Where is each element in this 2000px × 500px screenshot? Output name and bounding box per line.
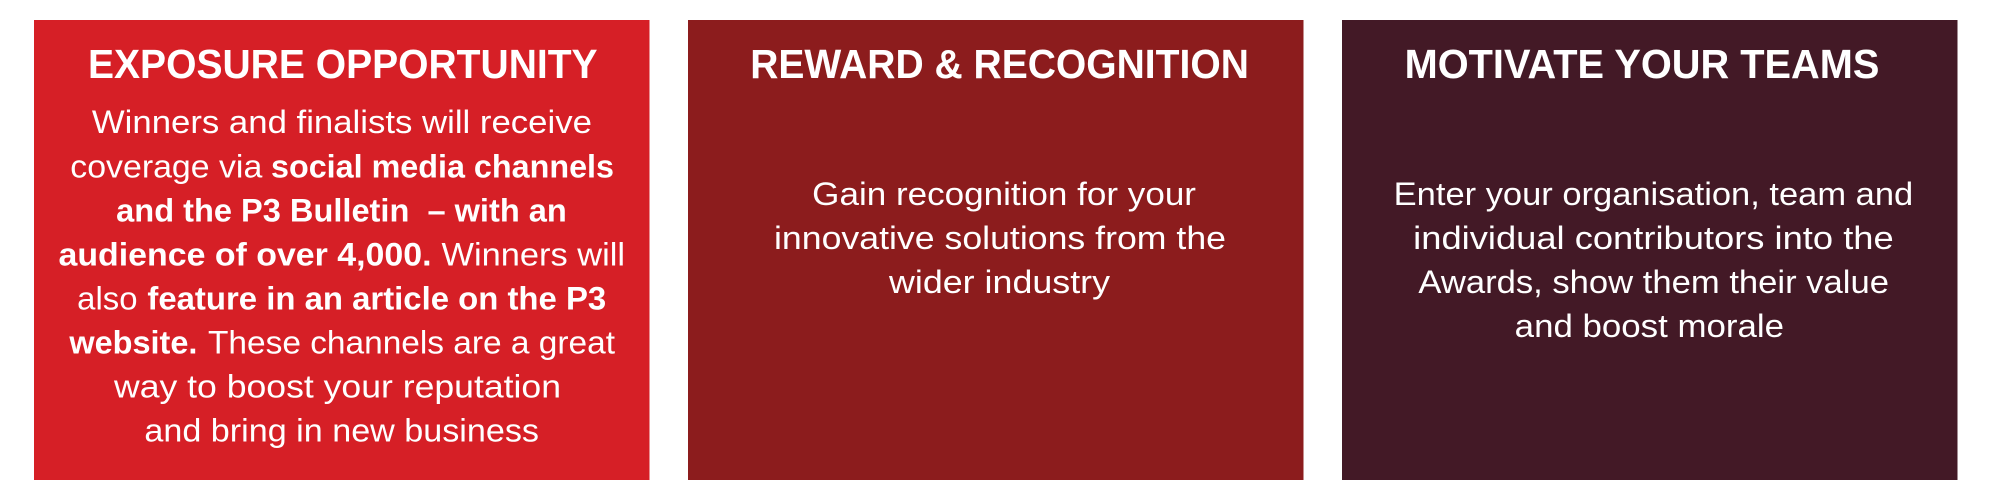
text block: reward description: Gain recognition for your	[812, 176, 1196, 212]
text block: motivate description: individual contributors into the	[1413, 220, 1894, 256]
text block: motivate description: Enter your organisation, team and	[1394, 176, 1913, 212]
panel: motivate your teams	[1342, 20, 1958, 480]
text block: motivate description: and boost morale	[1515, 308, 1784, 344]
text block: exposure description: audience of over 4,000.	[58, 236, 432, 272]
text block: motivate description	[1394, 176, 1913, 344]
text block: exposure description: website.	[68, 324, 197, 360]
heading: exposure opportunity: EXPOSURE OPPORTUNITY	[88, 41, 598, 87]
panel: exposure opportunity	[34, 20, 650, 480]
text block: exposure description: social media channels	[271, 148, 614, 184]
panel: reward and recognition	[688, 20, 1304, 480]
text block: exposure description: coverage via	[70, 148, 263, 184]
text block: exposure description: feature in an article on the P3	[147, 280, 606, 316]
text block: exposure description: and bring in new business	[144, 412, 539, 448]
text block: reward description: wider industry	[888, 264, 1111, 300]
text block: exposure description: way to boost your reputation	[113, 368, 561, 404]
text block: reward description: innovative solutions from the	[774, 220, 1226, 256]
text block: reward description	[774, 176, 1226, 300]
text block: exposure description: and the P3 Bulletin – with an	[116, 192, 567, 228]
text block: exposure description: Winners will	[442, 236, 625, 272]
text block: exposure description	[58, 104, 625, 448]
text block: exposure description: These channels are a great	[208, 324, 615, 360]
heading: motivate your teams: MOTIVATE YOUR TEAMS	[1405, 41, 1879, 87]
text block: exposure description: also	[77, 280, 138, 316]
text block: exposure description: Winners and finalists will receive	[92, 104, 592, 140]
text block: motivate description: Awards, show them their value	[1418, 264, 1889, 300]
heading: reward and recognition: REWARD & RECOGNITION	[750, 41, 1249, 87]
